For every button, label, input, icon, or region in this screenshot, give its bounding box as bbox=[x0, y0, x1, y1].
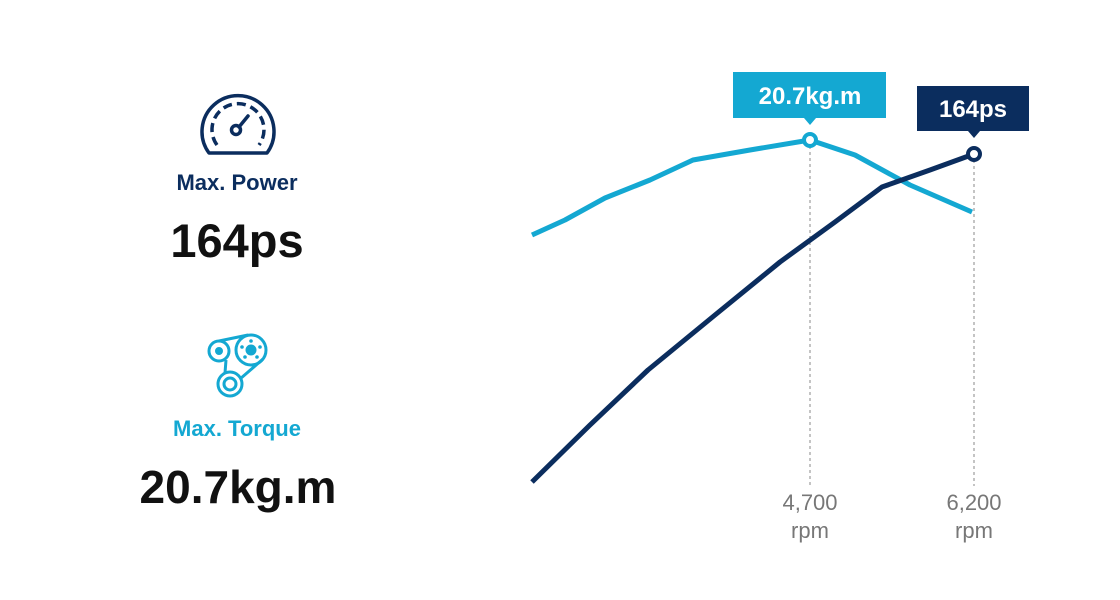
axis labels bbox=[782, 490, 1002, 543]
callout: torque: 20.7kg.m bbox=[759, 83, 861, 110]
icon: belt pulleys bbox=[208, 334, 268, 398]
torque line bbox=[532, 140, 972, 235]
value: 164ps: 164ps bbox=[170, 214, 304, 267]
axis labels: 6,200 bbox=[946, 490, 1002, 515]
axis labels: rpm bbox=[791, 518, 829, 543]
icon: speedometer bbox=[200, 94, 276, 155]
heading: Max. Torque: Max. Torque bbox=[173, 416, 301, 441]
axis labels: 4,700 bbox=[782, 490, 838, 515]
callout: power bbox=[917, 86, 1029, 138]
callout: torque bbox=[733, 72, 886, 125]
value: 20.7kg.m: 20.7kg.m bbox=[140, 461, 336, 513]
callout: power: 164ps bbox=[939, 96, 1007, 123]
heading: Max. Power: Max. Power bbox=[176, 170, 298, 195]
power line bbox=[532, 154, 974, 482]
axis labels: rpm bbox=[955, 518, 993, 543]
